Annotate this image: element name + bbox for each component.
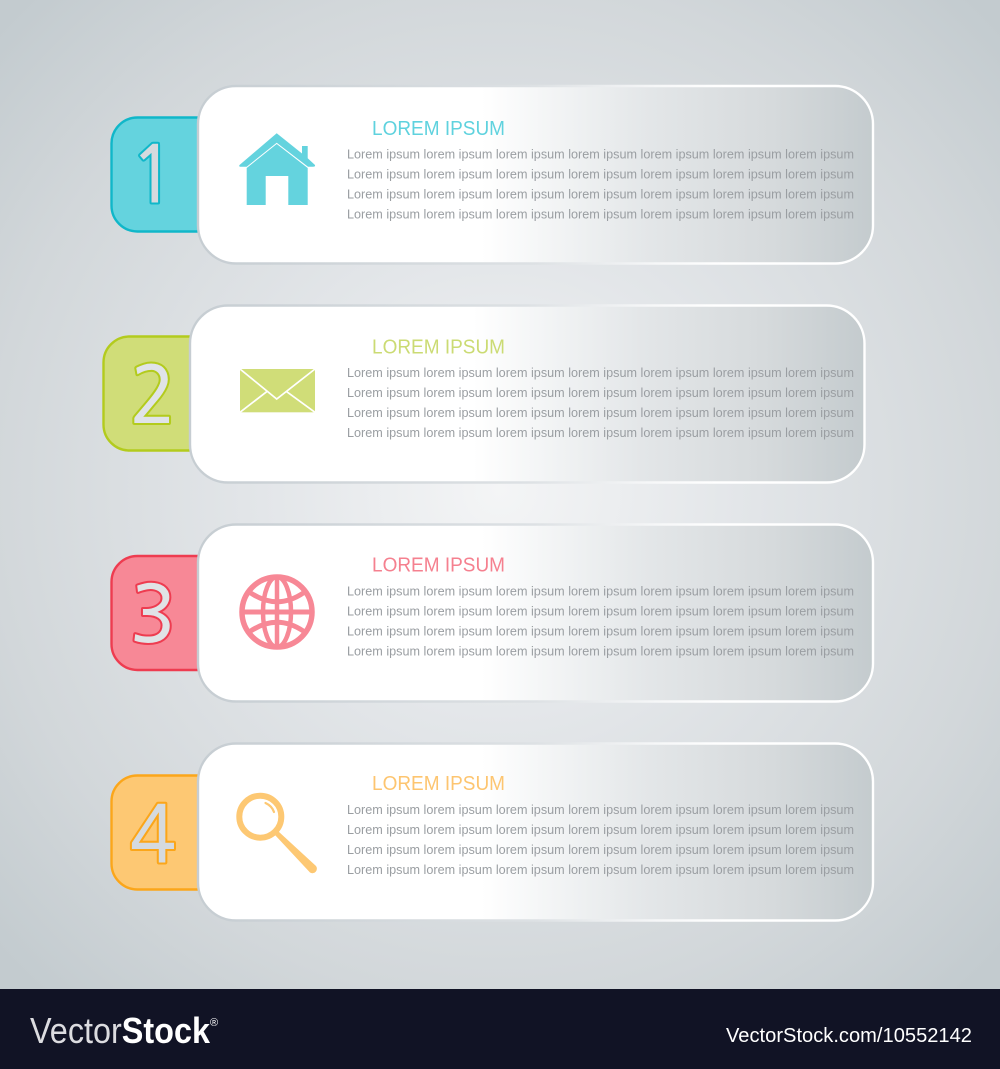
text block 2: Lorem ipsum lorem ipsum lorem ipsum lorem ipsum lorem ipsum lorem ipsum lorem ipsum bbox=[347, 406, 854, 420]
panel: step 4 bbox=[112, 744, 873, 920]
text block 1: Lorem ipsum lorem ipsum lorem ipsum lorem ipsum lorem ipsum lorem ipsum lorem ipsum bbox=[347, 148, 854, 162]
panel: step 2 bbox=[104, 306, 864, 482]
panel: step 3 bbox=[112, 524, 873, 702]
text block 2: Lorem ipsum lorem ipsum lorem ipsum lorem ipsum lorem ipsum lorem ipsum lorem ipsum bbox=[347, 426, 854, 440]
text block 4: Lorem ipsum lorem ipsum lorem ipsum lorem ipsum lorem ipsum lorem ipsum lorem ipsum bbox=[347, 803, 854, 817]
text block 3: Lorem ipsum lorem ipsum lorem ipsum lorem ipsum lorem ipsum lorem ipsum lorem ipsum bbox=[347, 604, 854, 618]
card 3 bbox=[198, 524, 873, 702]
text block 1: Lorem ipsum lorem ipsum lorem ipsum lorem ipsum lorem ipsum lorem ipsum lorem ipsum bbox=[347, 188, 854, 202]
card 2 bbox=[190, 306, 864, 482]
numeral 2: 2 bbox=[129, 356, 177, 436]
logo wordmark: VectorStock bbox=[30, 1010, 211, 1051]
text block 3: Lorem ipsum lorem ipsum lorem ipsum lorem ipsum lorem ipsum lorem ipsum lorem ipsum bbox=[347, 584, 854, 598]
registered mark: ® bbox=[210, 1017, 218, 1029]
text block 2: Lorem ipsum lorem ipsum lorem ipsum lorem ipsum lorem ipsum lorem ipsum lorem ipsum bbox=[347, 386, 854, 400]
footer banner bbox=[0, 989, 1000, 1069]
heading 2: LOREM IPSUM bbox=[372, 336, 505, 358]
icon: globe bbox=[242, 577, 312, 647]
image id: VectorStock.com/10552142 bbox=[726, 1024, 972, 1047]
card 1 bbox=[198, 86, 873, 264]
text block 1 bbox=[347, 148, 854, 222]
numeral 1: 1 bbox=[129, 136, 177, 216]
text block 3: Lorem ipsum lorem ipsum lorem ipsum lorem ipsum lorem ipsum lorem ipsum lorem ipsum bbox=[347, 624, 854, 638]
numeral 3: 3 bbox=[129, 576, 177, 655]
text block 4 bbox=[347, 803, 854, 877]
number tab 1 bbox=[112, 118, 205, 232]
panel: step 1 bbox=[112, 86, 873, 264]
numeral 4: 4 bbox=[129, 796, 177, 876]
number tab 3 bbox=[112, 556, 205, 670]
number tab 2 bbox=[104, 336, 197, 450]
heading 3: LOREM IPSUM bbox=[372, 554, 505, 576]
icon: magnifier bbox=[239, 796, 317, 873]
text block 3: Lorem ipsum lorem ipsum lorem ipsum lorem ipsum lorem ipsum lorem ipsum lorem ipsum bbox=[347, 644, 854, 658]
text block 4: Lorem ipsum lorem ipsum lorem ipsum lorem ipsum lorem ipsum lorem ipsum lorem ipsum bbox=[347, 843, 854, 857]
icon: house bbox=[239, 133, 315, 205]
text block 2: Lorem ipsum lorem ipsum lorem ipsum lorem ipsum lorem ipsum lorem ipsum lorem ipsum bbox=[347, 366, 854, 380]
heading 1: LOREM IPSUM bbox=[372, 118, 505, 140]
text block 2 bbox=[347, 366, 854, 440]
text block 1: Lorem ipsum lorem ipsum lorem ipsum lorem ipsum lorem ipsum lorem ipsum lorem ipsum bbox=[347, 168, 854, 182]
text block 4: Lorem ipsum lorem ipsum lorem ipsum lorem ipsum lorem ipsum lorem ipsum lorem ipsum bbox=[347, 823, 854, 837]
text block 3 bbox=[347, 584, 854, 658]
number tab 4 bbox=[112, 776, 205, 890]
icon: envelope bbox=[240, 369, 315, 412]
text block 1: Lorem ipsum lorem ipsum lorem ipsum lorem ipsum lorem ipsum lorem ipsum lorem ipsum bbox=[347, 208, 854, 222]
heading 4: LOREM IPSUM bbox=[372, 773, 505, 795]
text block 4: Lorem ipsum lorem ipsum lorem ipsum lorem ipsum lorem ipsum lorem ipsum lorem ipsum bbox=[347, 863, 854, 877]
card 4 bbox=[198, 744, 873, 920]
